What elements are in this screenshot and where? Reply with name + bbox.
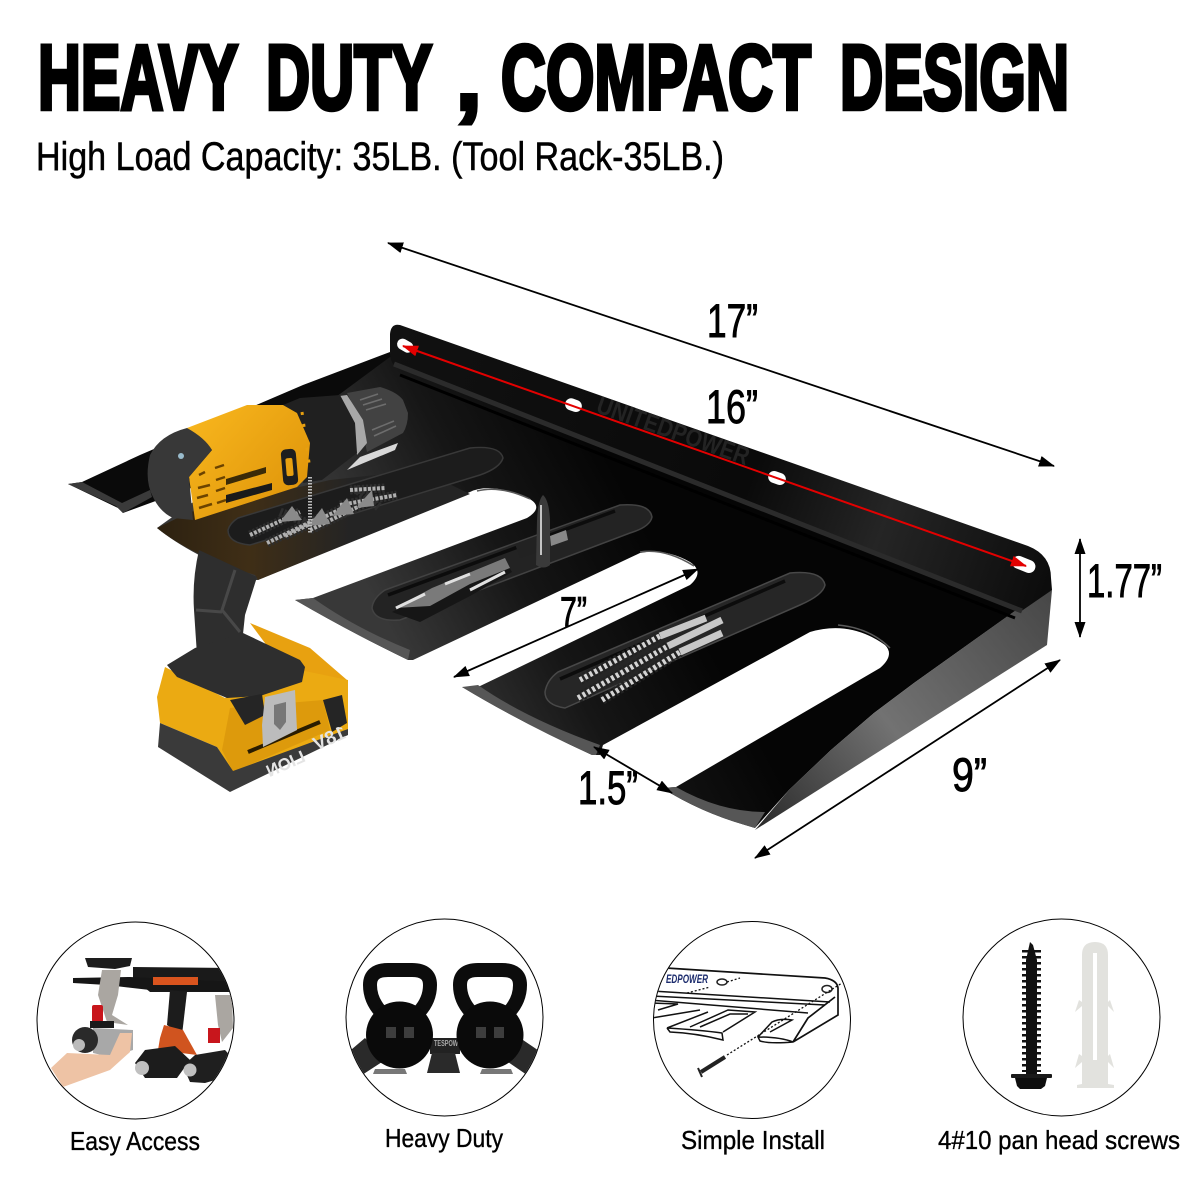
- left bell shine: [386, 1027, 414, 1038]
- chuck: [347, 387, 408, 452]
- grille: [197, 465, 226, 508]
- trigger button: [280, 448, 299, 486]
- hole 3: [766, 469, 788, 487]
- dimension: 9 inch: [755, 660, 1060, 858]
- brand: EDPOWER: [666, 972, 708, 986]
- hand: [51, 1033, 132, 1087]
- bit body: [395, 558, 510, 608]
- brand engraving: UNITEDPOWER: [593, 391, 753, 471]
- chuck tip: [73, 1039, 85, 1051]
- pocket 2: [372, 505, 652, 620]
- plate outline: [650, 967, 838, 1042]
- rack arms: [352, 1038, 537, 1074]
- side badge: [226, 483, 272, 503]
- label 1.77: 1.77”: [1087, 554, 1162, 607]
- battery LiON: LION: [263, 747, 308, 781]
- pocket 2 upper shadow: [388, 511, 615, 595]
- drill 3 chuck tip: [184, 1064, 196, 1076]
- label strip: [248, 722, 320, 752]
- shanks: [660, 618, 722, 652]
- screw: [701, 1057, 725, 1072]
- left finger front: [157, 470, 470, 580]
- label: Simple Install: [681, 1125, 825, 1155]
- plastic anchor: [1075, 942, 1114, 1088]
- dimension: 7 inch: [454, 569, 698, 677]
- title: ,: [456, 27, 482, 129]
- slot ovals: [717, 979, 727, 985]
- gear collar: [283, 395, 357, 483]
- dimension: 1.5 inch: [578, 747, 672, 814]
- mounting holes: [395, 337, 1037, 575]
- body yellow: [187, 405, 310, 520]
- arrow 9: [755, 660, 1060, 858]
- drill head gray: [93, 1028, 133, 1057]
- bit shadow: [392, 560, 512, 622]
- label: Easy Access: [70, 1126, 200, 1156]
- side label: [226, 467, 266, 485]
- arrow 1.77: [1079, 539, 1081, 637]
- red battery: [92, 1005, 103, 1022]
- label: 4#10 pan head screws: [938, 1125, 1180, 1155]
- slot oval 2: [822, 986, 832, 992]
- pocket 3: [545, 572, 825, 708]
- tool rack: [68, 325, 1052, 830]
- right bell: [456, 1002, 524, 1068]
- label 17: 17”: [707, 294, 758, 347]
- right handle: [460, 970, 520, 1012]
- black screw: [1011, 942, 1052, 1089]
- dotted guides: [687, 978, 842, 1055]
- hole 4: [1010, 554, 1037, 575]
- flutes dark: [578, 636, 680, 700]
- rack plate: [133, 967, 240, 992]
- silver ring: [332, 395, 367, 455]
- drill 2 head: [135, 1046, 190, 1078]
- screw flange: [1011, 1074, 1052, 1078]
- label: Heavy Duty: [385, 1123, 503, 1153]
- screw threads: [250, 488, 397, 543]
- back plate: [390, 325, 1052, 612]
- battery mount: [167, 633, 305, 698]
- arrow 17: [388, 243, 1054, 466]
- pulled drill base: [85, 958, 132, 969]
- drill bits: [578, 618, 722, 700]
- rack bar: [430, 1038, 460, 1054]
- side wall: [755, 590, 1052, 830]
- flutes light: [578, 636, 680, 700]
- tools on rack: [51, 958, 240, 1087]
- hole 2: [563, 397, 584, 414]
- battery yellow: [157, 667, 348, 772]
- plate fold lines: [650, 991, 830, 1013]
- rack feet: [373, 1069, 513, 1074]
- small socket: [515, 536, 538, 558]
- slot rims: [477, 489, 890, 648]
- battery 18V: 18V: [310, 723, 349, 756]
- pliers bits: [392, 495, 568, 622]
- motor cap light: [178, 453, 184, 459]
- title: DUTY: [266, 27, 431, 129]
- drill 2 chuck tip: [135, 1061, 149, 1075]
- title: COMPACT: [501, 27, 811, 129]
- pocket 1: [228, 447, 503, 545]
- subtitle: High Load Capacity: 35LB. (Tool Rack-35LB.): [36, 135, 724, 179]
- circle 1 outline: [37, 922, 234, 1119]
- left side wall: [68, 352, 395, 513]
- cross bit: [550, 530, 568, 546]
- label 16: 16”: [706, 380, 758, 433]
- handle grip: [196, 570, 240, 632]
- pocket 3 upper shadow: [560, 581, 785, 679]
- rack brand: TESPOW: [434, 1039, 458, 1048]
- dimension: 1.77 inch: [1080, 539, 1162, 637]
- red arrow 16: [403, 346, 1026, 566]
- battery vent: [323, 695, 347, 732]
- right bell shine: [476, 1027, 504, 1038]
- upright bit: [536, 495, 550, 568]
- finger 2: [667, 1010, 755, 1040]
- white gap under chuck: [347, 443, 398, 470]
- screw head: [1015, 1078, 1047, 1089]
- motor cap: [148, 428, 212, 520]
- circle 4 outline: [963, 919, 1160, 1116]
- hole 1: [395, 337, 415, 355]
- screw shafts: [250, 488, 397, 543]
- battery base: [158, 723, 348, 792]
- label 1.5: 1.5”: [578, 761, 638, 814]
- trigger highlight: [285, 458, 294, 476]
- left finger: [652, 1003, 700, 1018]
- label 7: 7”: [560, 588, 587, 635]
- circle 3 outline: [654, 922, 850, 1118]
- kettlebells on rack: [345, 970, 545, 1075]
- drill 3 head: [186, 1050, 228, 1083]
- finger front lips: [295, 598, 765, 828]
- drill 2 orange: [158, 1025, 197, 1055]
- mount pods: [230, 694, 265, 725]
- orange label: [153, 977, 198, 985]
- left bell: [366, 1002, 433, 1068]
- left handle: [370, 970, 430, 1012]
- shelf floor with fingers: [157, 357, 1022, 828]
- screw head: [698, 1068, 702, 1077]
- collar marks: [302, 412, 310, 470]
- arrow 1.5: [594, 747, 672, 793]
- title: DESIGN: [840, 27, 1069, 129]
- feature: easy access: [37, 922, 240, 1156]
- spring: [308, 477, 312, 533]
- plate fold: [394, 364, 1022, 611]
- rack rod: [73, 977, 240, 992]
- handle: [194, 550, 257, 655]
- chuck ridges: [360, 394, 396, 436]
- circle 2 outline: [346, 919, 543, 1116]
- feature: simple install: [650, 922, 850, 1155]
- left flange: [68, 482, 152, 513]
- title: HEAVY: [38, 27, 237, 129]
- battery back yellow: [250, 623, 348, 700]
- pulled drill handle: [98, 970, 128, 1025]
- anchor body: [1075, 942, 1114, 1088]
- screw shaft: [1026, 942, 1037, 1074]
- feature: heavy duty: [345, 919, 545, 1153]
- line drawing of rack: [650, 967, 842, 1077]
- drill 3 red battery: [208, 1028, 220, 1043]
- screw heads: [280, 490, 374, 526]
- clip slot: [274, 702, 286, 730]
- drill: [148, 387, 408, 792]
- chuck dark: [72, 1027, 98, 1053]
- battery shade: [222, 700, 330, 772]
- belt clip: [262, 690, 297, 747]
- plate fold shadow: [400, 375, 1015, 618]
- dimension: 17 inch: [388, 243, 1054, 466]
- drill 2 handle: [167, 992, 187, 1030]
- screw thread: [1022, 950, 1041, 1072]
- finger 3: [758, 1019, 793, 1043]
- label 9: 9”: [952, 748, 987, 801]
- screws: [250, 488, 397, 543]
- black band: [90, 1021, 114, 1028]
- arrow 7: [454, 569, 698, 677]
- dimension: 16 inch: [403, 346, 1026, 566]
- rack centre: [427, 1053, 460, 1073]
- feature: screws: [938, 919, 1180, 1155]
- drill 3 handle: [215, 995, 233, 1042]
- bit highlights: [396, 572, 505, 608]
- upright bit highlight: [540, 505, 542, 555]
